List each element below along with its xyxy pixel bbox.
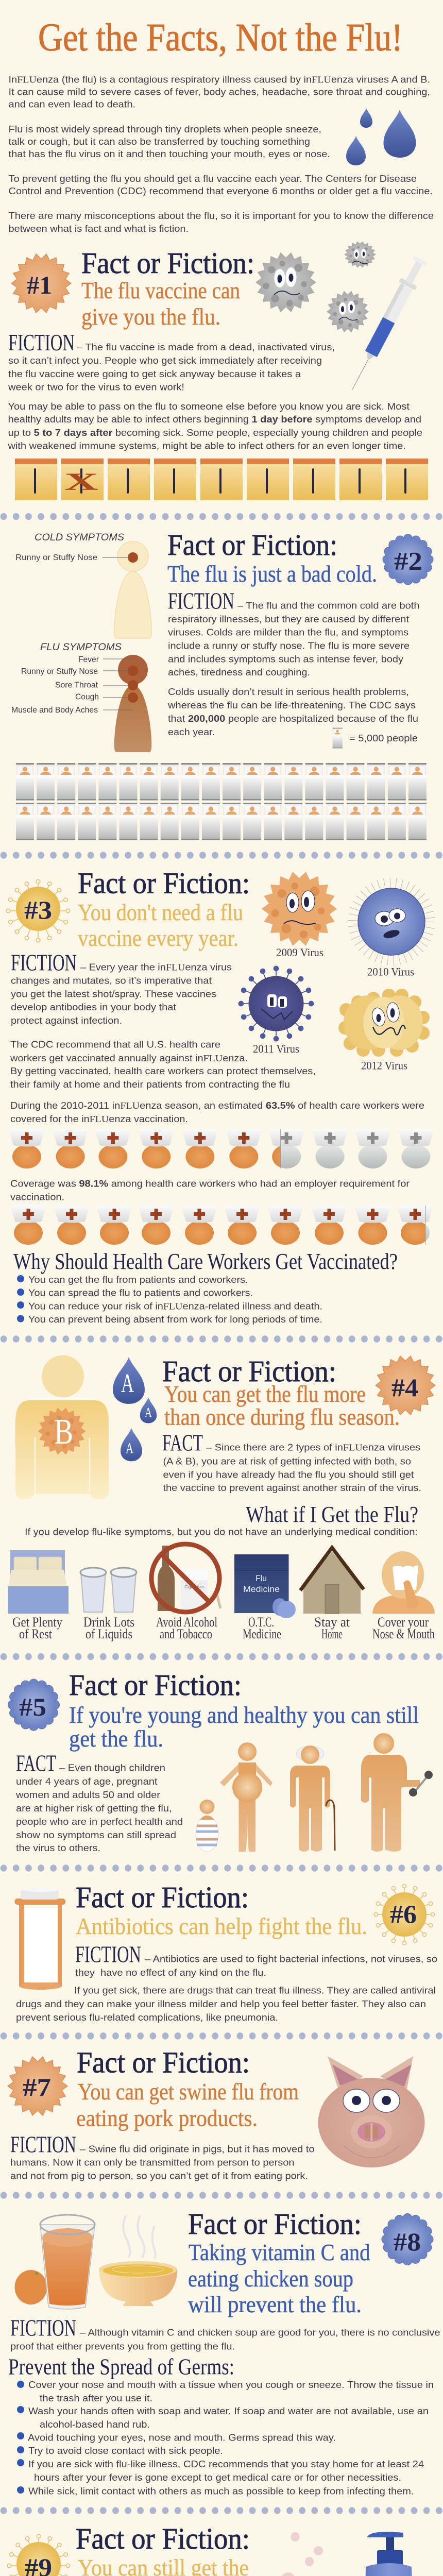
icon: bed xyxy=(8,1550,69,1614)
fact text 5: under 4 years of age, pregnant xyxy=(16,1776,158,1787)
panel: myth 1 xyxy=(7,241,429,500)
question 1: The flu vaccine can xyxy=(81,277,240,303)
legend: one bed equals 5,000 people xyxy=(333,728,418,748)
badge: number 8 xyxy=(382,2213,433,2265)
fiction text 2: whereas the flu can be life-threatening. The CDC says xyxy=(167,700,416,710)
question 4: You can get the flu more xyxy=(164,1381,366,1407)
question 7 xyxy=(76,2078,299,2131)
bullet list: prevention tips: Try to avoid close contact with sick people. xyxy=(28,2446,223,2456)
diagram: flu symptoms figure: FLU SYMPTOMS xyxy=(40,642,122,653)
question 1: give you the flu. xyxy=(81,303,220,330)
heading: fact or fiction 9: Fact or Fiction: xyxy=(76,2522,250,2555)
intro text: It can cause mild to severe cases of fever, body aches, headache, sore throat and coughing, xyxy=(8,87,430,97)
bullet list: prevention tips xyxy=(17,2380,434,2497)
question 7: eating pork products. xyxy=(76,2105,258,2131)
icon: flu medicine box xyxy=(234,1554,296,1618)
heading: fact or fiction 5: Fact or Fiction: xyxy=(69,1668,242,1702)
fact text 5 xyxy=(15,1750,183,1853)
icon: pill bottle xyxy=(14,1888,65,1990)
icon: soup bowl xyxy=(99,2215,177,2306)
captions: what to do: Get Plenty xyxy=(12,1615,62,1630)
heading: fact or fiction 3: Fact or Fiction: xyxy=(78,867,250,900)
fiction text 2: – The flu and the common cold are both xyxy=(237,601,419,611)
coverage text xyxy=(10,1179,410,1202)
fiction text 8: – Although vitamin C and chicken soup are good for you, there is no conclusive xyxy=(80,2327,440,2337)
intro text: There are many misconceptions about the flu, so it is important for you to know the difference xyxy=(8,211,434,221)
icon: no alcohol or tobacco xyxy=(151,1544,220,1612)
captions: what to do: Cover your xyxy=(378,1615,429,1630)
question 3 xyxy=(78,899,243,951)
fiction text 3: – Every year the in FLUenza virus xyxy=(80,962,232,972)
fiction text 7 xyxy=(10,2131,314,2181)
captions: what to do xyxy=(12,1615,435,1641)
fiction text 1: the flu vaccine were going to get sick anyway because it takes a xyxy=(8,369,301,379)
fact text 4: (A & B), you are at risk of getting infected with both, so xyxy=(163,1456,411,1467)
icon: 2009 virus xyxy=(262,872,337,959)
illustration: person with virus B and drops A: A xyxy=(145,1405,152,1420)
badge: number 7: #7 xyxy=(23,2073,51,2102)
heading: fact or fiction 4: Fact or Fiction: xyxy=(162,1354,336,1388)
fact text 4: the vaccine to prevent against another strain of the virus. xyxy=(163,1483,421,1493)
fiction text 1: so it can’t infect you. People who get sick immediately after receiving xyxy=(8,355,322,366)
illustration: person with virus B and drops A: A xyxy=(126,1440,133,1457)
fiction text 1: up to 5 to 7 days after becoming sick. Some people, especially young children and people xyxy=(8,428,422,438)
fiction text 2: aches, tiredness and coughing. xyxy=(168,667,310,677)
fiction text 2: include a runny or stuffy nose. The flu is more severe xyxy=(168,641,410,651)
panel: myth 4 xyxy=(8,1354,435,1641)
bullet list: prevention tips: hours after your fever is gone except to get medical care or for other necessities. xyxy=(34,2472,401,2483)
panel: myth 6 xyxy=(14,1880,437,2023)
fiction text 8: FICTION xyxy=(10,2314,76,2341)
question 5: get the flu. xyxy=(69,1725,163,1752)
icon: glass of juice xyxy=(40,2215,95,2309)
icon: 2010 virus xyxy=(354,884,429,978)
bullet list: prevention tips: Avoid touching your eyes, nose and mouth. Germs spread this way. xyxy=(28,2433,336,2443)
panel: myth 3 xyxy=(6,867,434,1325)
heading: prevent the spread of germs: Prevent the Spread of Germs: xyxy=(8,2354,234,2379)
intro text: between what is fact and what is fiction. xyxy=(8,224,189,234)
fiction text 6: they have no effect of any kind on the flu. xyxy=(75,1968,266,1978)
fiction text 8: proof that either prevents you from getting the flu. xyxy=(10,2341,235,2351)
fiction text 1: – The flu vaccine is made from a dead, inactivated virus, xyxy=(77,342,335,352)
intro text: that has the flu virus on it and then touching your mouth, eyes or nose. xyxy=(8,149,330,159)
badge: number 9 xyxy=(7,2534,70,2576)
pictogram: hospital beds xyxy=(16,763,427,840)
icon: 2011 virus xyxy=(238,966,314,1055)
diagram: flu symptoms figure: Runny or Stuffy Nose xyxy=(21,667,98,676)
question 3: You don't need a flu xyxy=(78,899,243,925)
fiction text 2 xyxy=(167,588,419,737)
badge: number 3 xyxy=(6,879,70,942)
fiction text 8 xyxy=(10,2314,440,2351)
illustration: soap pump bottle xyxy=(364,2532,415,2576)
question 7: You can get swine flu from xyxy=(78,2078,299,2105)
question 1 xyxy=(81,277,240,330)
legend: one bed equals 5,000 people: = 5,000 people xyxy=(349,733,418,743)
bullet list: reasons: You can reduce your risk of in FLUenza-related illness and death. xyxy=(28,1301,322,1312)
diagram: flu symptoms figure xyxy=(11,642,151,752)
badge: number 8: #8 xyxy=(394,2227,421,2256)
badge: number 4 xyxy=(376,1356,435,1415)
fiction text 3: their family at home and their patients from contracting the flu xyxy=(10,1079,290,1090)
diagram: cold symptoms figure: Runny or Stuffy Nose xyxy=(15,553,97,562)
icon: 2010 virus: 2010 Virus xyxy=(367,965,414,978)
bullet list: reasons: You can get the flu from patients and coworkers. xyxy=(28,1275,248,1285)
question 8: eating chicken soup xyxy=(188,2265,353,2292)
question 8 xyxy=(188,2239,370,2317)
icon: grey virus small top xyxy=(344,241,376,268)
icon: orange fruit xyxy=(14,2270,47,2304)
question 5: If you're young and healthy you can still xyxy=(69,1702,419,1728)
fiction text 2: each year. xyxy=(168,727,215,737)
fiction text 3 xyxy=(10,949,424,1124)
heading: fact or fiction 7: Fact or Fiction: xyxy=(77,2046,250,2079)
coverage text: vaccination. xyxy=(10,1192,64,1202)
intro text: Control and Prevention (CDC) recommend that everyone 6 months or older get a flu vaccine. xyxy=(8,186,433,196)
panel: myth 5 xyxy=(8,1668,433,1853)
fiction text 7: and not from pig to person, so you can’t get of it from eating pork. xyxy=(10,2171,308,2181)
illustration: pregnant woman xyxy=(220,1742,272,1852)
fiction text 3: FICTION xyxy=(11,949,77,975)
bullet list: prevention tips: While sick, limit contact with others as much as possible to keep from infecting them. xyxy=(28,2486,414,2497)
fiction text 2: Colds usually don’t result in serious health problems, xyxy=(168,687,409,697)
diagram: cold symptoms figure: COLD SYMPTOMS xyxy=(35,532,124,543)
badge: number 5 xyxy=(8,1679,60,1731)
illustration: young man with dumbbell xyxy=(361,1733,433,1852)
bullet list: prevention tips: If you are sick with flu-like illness, CDC recommends that you stay home for at least 24 xyxy=(28,2459,424,2469)
fiction text 6 xyxy=(16,1941,437,2023)
chart: nine day calendar xyxy=(15,459,428,500)
fiction text 3: develop antibodies in your body that xyxy=(11,1002,176,1012)
fiction text 6: If you get sick, there are drugs that can treat flu illness. They are called antiviral xyxy=(74,1986,436,1996)
question 4 xyxy=(164,1381,400,1430)
icon: grey virus small bottom xyxy=(327,291,369,332)
icon: grey virus large xyxy=(255,252,316,312)
heading: fact or fiction 2: Fact or Fiction: xyxy=(167,528,337,562)
question 2: The flu is just a bad cold. xyxy=(167,561,377,587)
fiction text 3: workers get vaccinated annually against in FLUenza. xyxy=(10,1053,248,1063)
bullet list: reasons xyxy=(17,1275,322,1325)
fiction text 6: – Antibiotics are used to fight bacterial infections, not viruses, so xyxy=(145,1954,437,1964)
illustration: person with virus B and drops A xyxy=(15,1355,157,1499)
icon: flu medicine box: Medicine xyxy=(243,1584,280,1594)
badge: number 3: #3 xyxy=(24,895,52,924)
fact text 5: women and adults 50 and older xyxy=(15,1790,160,1800)
diagram: flu symptoms figure: Sore Throat xyxy=(55,681,98,689)
icon: no alcohol or tobacco: Cigarettes xyxy=(184,1585,204,1589)
fiction text 1: with weakened immune systems, might be able to infect others for an even longer time. xyxy=(7,441,406,451)
fact text 5: the virus to others. xyxy=(16,1843,100,1853)
icon: 2012 virus: 2012 Virus xyxy=(361,1059,407,1072)
fiction text 1: healthy adults may be able to infect others beginning 1 day before symptoms develop and xyxy=(8,414,421,425)
panel: myth 9 xyxy=(7,2522,433,2576)
fiction text 6: prevent serious flu-related complications, like pneumonia. xyxy=(16,2012,278,2023)
question 6: Antibiotics can help fight the flu. xyxy=(76,1913,367,1939)
intro text: InFLUenza (the flu) is a contagious respiratory illness caused by in FLUenza viruses A and B. xyxy=(8,75,430,85)
badge: number 5: #5 xyxy=(19,1692,46,1721)
diagram: flu symptoms figure: Cough xyxy=(75,692,99,702)
question 8: will prevent the flu. xyxy=(188,2291,362,2317)
question 8: Taking vitamin C and xyxy=(189,2239,370,2265)
question 4: than once during flu season. xyxy=(164,1404,400,1430)
heading: fact or fiction 1: Fact or Fiction: xyxy=(81,246,254,280)
badge: number 1 xyxy=(11,254,71,313)
captions: what to do: O.T.C. xyxy=(248,1615,274,1630)
badge: number 7 xyxy=(8,2057,67,2115)
badge: number 2 xyxy=(383,534,433,585)
captions: what to do: Stay at xyxy=(314,1615,350,1630)
fact text 4: – Since there are 2 types of in FLUenza viruses xyxy=(206,1443,420,1453)
fiction text 2: viruses. Colds are milder than the flu, and symptoms xyxy=(168,627,408,637)
fiction text 3: By getting vaccinated, health care workers can protect themselves, xyxy=(10,1066,316,1076)
fiction text 2: that 200,000 people are hospitalized because of the flu xyxy=(168,714,418,724)
captions: what to do: of Rest xyxy=(19,1626,53,1641)
badge: number 2: #2 xyxy=(394,547,422,575)
icon: 2012 virus xyxy=(338,989,430,1072)
chart: nine day calendar: X xyxy=(64,468,99,496)
icon: syringe xyxy=(344,255,429,394)
illustration: person with virus B and drops A: B xyxy=(54,1412,73,1452)
intro: flu-like symptoms: If you develop flu-like symptoms, but you do not have an underlying medical condition: xyxy=(25,1527,418,1537)
fiction text 3: protect against infection. xyxy=(11,1015,122,1026)
illustration: elderly man with cane xyxy=(290,1745,335,1852)
fiction text 1: week or two for the virus to even work! xyxy=(8,382,184,393)
fact text 4: FACT xyxy=(162,1430,203,1456)
diagram: cold symptoms figure xyxy=(15,532,151,638)
fiction text 2: respiratory illnesses, but they are caused by different xyxy=(168,614,409,624)
panel: myth 8 xyxy=(8,2207,440,2497)
fiction text 3: you get the latest shot/spray. These vaccines xyxy=(11,989,216,999)
fact text 4: even if you have already had the flu you should still get xyxy=(163,1470,414,1480)
fact text 5: FACT xyxy=(16,1750,56,1776)
captions: what to do: and Tobacco xyxy=(160,1626,212,1641)
heading: fact or fiction 6: Fact or Fiction: xyxy=(76,1880,249,1914)
captions: what to do: Avoid Alcohol xyxy=(156,1615,217,1630)
bullet list: reasons: You can spread the flu to patients and coworkers. xyxy=(28,1288,253,1298)
icon: glasses of water xyxy=(80,1568,137,1612)
intro text: Flu is most widely spread through tiny droplets when people sneeze, xyxy=(8,124,321,134)
badge: number 4: #4 xyxy=(391,1373,418,1402)
fiction text 7: humans. Now it can only be transmitted from person to person xyxy=(10,2158,295,2168)
fiction text 1: You may be able to pass on the flu to someone else before you know you are sick. Most xyxy=(8,401,410,412)
coverage text: Coverage was 98.1% among health care workers who had an employer requirement for xyxy=(10,1179,410,1189)
fiction text 1 xyxy=(7,329,422,451)
icon: 2011 virus: 2011 Virus xyxy=(253,1042,299,1055)
fact text 5: – Even though children xyxy=(59,1763,165,1773)
illustration: soap bubbles xyxy=(274,2532,323,2576)
fact text 4 xyxy=(162,1430,421,1493)
fiction text 1: FICTION xyxy=(8,329,75,355)
question 3: vaccine every year. xyxy=(78,925,238,951)
diagram: flu symptoms figure: Fever xyxy=(78,655,99,664)
icon: house xyxy=(300,1548,364,1614)
illustration: person with virus B and drops A: A xyxy=(121,1369,134,1398)
pictogram: 98.1% nurses xyxy=(10,1206,433,1245)
icon: flu medicine box: Flu xyxy=(255,1573,267,1583)
icon: cover nose and mouth xyxy=(372,1551,435,1614)
fiction text 3: During the 2010-2011 in FLUenza season, an estimated 63.5% of health care workers were xyxy=(10,1100,424,1111)
fiction text 3: changes and mutates, so it’s imperative that xyxy=(11,976,212,986)
icon: pig face xyxy=(318,2056,424,2167)
heading: fact or fiction 8: Fact or Fiction: xyxy=(188,2207,362,2241)
panel: myth 7 xyxy=(8,2046,425,2181)
bullet list: prevention tips: Cover your nose and mouth with a tissue when you cough or sneeze. Throw the tissue in xyxy=(28,2380,434,2390)
captions: what to do: Medicine xyxy=(243,1626,281,1641)
bullet list: prevention tips: the trash after you use it. xyxy=(40,2393,152,2403)
captions: what to do: Drink Lots xyxy=(83,1615,134,1630)
fact text 5: show no symptoms can still spread xyxy=(16,1830,176,1840)
fiction text 3: The CDC recommend that all U.S. health care xyxy=(10,1040,220,1050)
intro text xyxy=(8,75,434,234)
badge: number 6: #6 xyxy=(390,1900,417,1928)
question 5 xyxy=(69,1702,419,1752)
badge: number 6 xyxy=(374,1884,435,1945)
bullet list: prevention tips: alcohol-based hand rub. xyxy=(40,2419,150,2430)
diagram: flu symptoms figure: Muscle and Body Aches xyxy=(11,706,98,715)
fiction text 2: and includes symptoms such as intense fever, body xyxy=(168,654,403,665)
fact text 5: people who are in perfect health and xyxy=(16,1817,183,1827)
bullet list: prevention tips: Wash your hands often with soap and water. If soap and water are not available, use an xyxy=(28,2406,429,2416)
intro text: talk or cough, but it can also be transferred by touching something xyxy=(8,137,310,147)
captions: what to do: of Liquids xyxy=(86,1626,132,1641)
icon: 2009 virus: 2009 Virus xyxy=(276,946,323,959)
icon: water droplets xyxy=(346,108,416,165)
illustration: baby xyxy=(196,1800,218,1852)
fiction text 6: drugs and they can make your illness milder and help you feel better faster. They also can xyxy=(16,1999,426,2009)
bullet list: reasons: You can prevent being absent from work for long periods of time. xyxy=(28,1314,322,1325)
panel: myth 2 xyxy=(11,528,433,840)
fact text 5: are at higher risk of getting the flu, xyxy=(16,1803,172,1814)
badge: number 1: #1 xyxy=(27,270,52,299)
intro text: To prevent getting the flu you should get a flu vaccine each year. The Centers for Disease xyxy=(8,174,417,184)
fiction text 6: FICTION xyxy=(75,1941,141,1968)
captions: what to do: Home xyxy=(321,1626,343,1641)
fiction text 7: – Swine flu did originate in pigs, but it has moved to xyxy=(80,2144,314,2155)
heading: what if I get the flu: What if I Get the Flu? xyxy=(246,1502,418,1527)
fiction text 2: FICTION xyxy=(168,588,234,614)
fiction text 3: covered for the in FLUenza vaccination. xyxy=(10,1114,188,1124)
fiction text 7: FICTION xyxy=(10,2131,76,2158)
pictogram: 63.5% nurses xyxy=(9,1129,434,1168)
intro text: and can even lead to death. xyxy=(8,99,135,110)
